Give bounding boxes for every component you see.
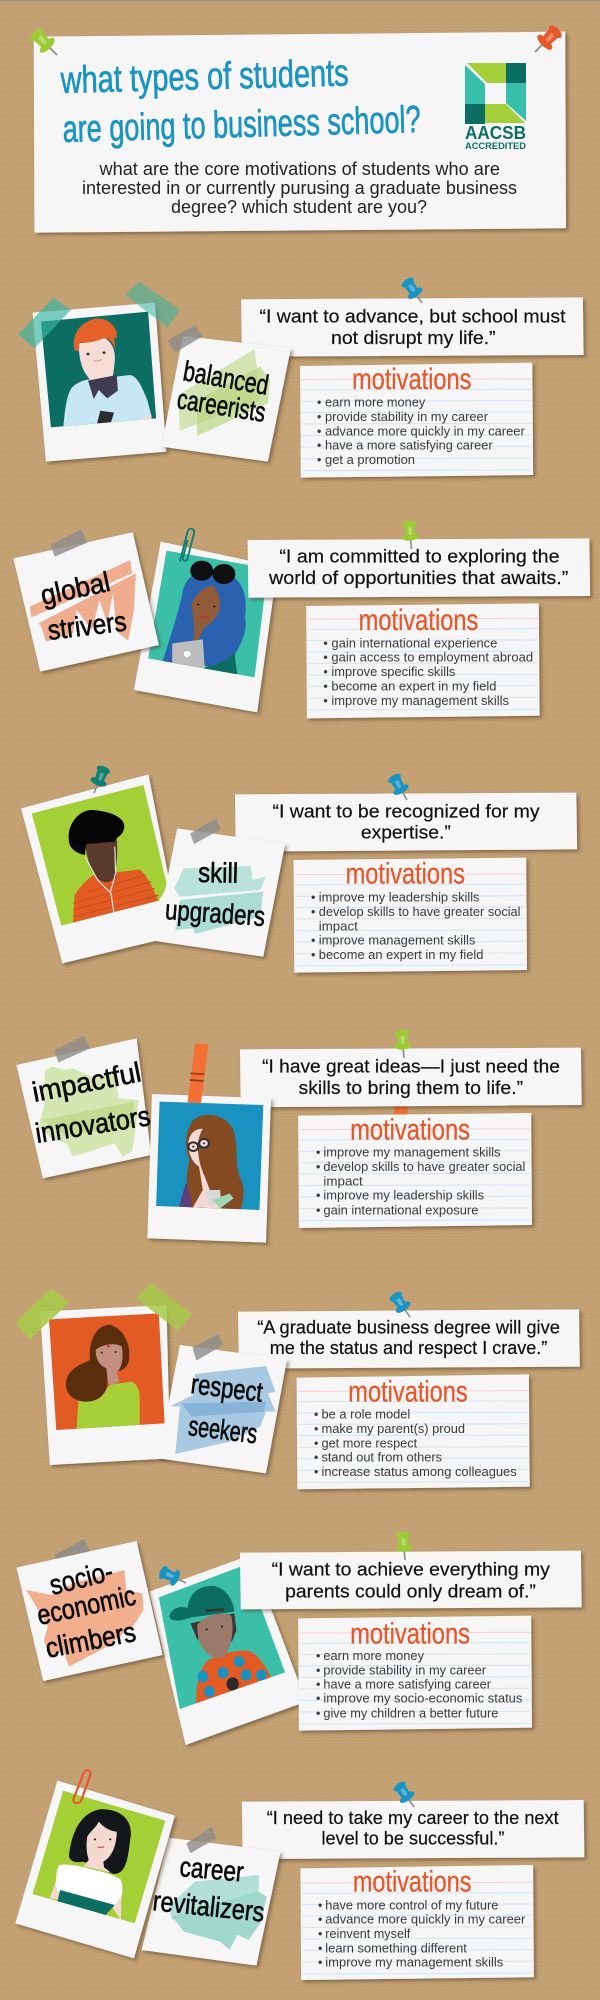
motivations card: develop skills to have greater social bbox=[323, 1160, 525, 1174]
motivations card: • bbox=[314, 1436, 318, 1450]
motivations card: increase status among colleagues bbox=[322, 1465, 517, 1479]
motivations card: have more control of my future bbox=[325, 1898, 498, 1912]
icon: orange pin bbox=[528, 22, 565, 59]
motivations card: become an expert in my field bbox=[319, 948, 483, 962]
motivations card: • bbox=[318, 1956, 322, 1970]
note: global strivers: strivers bbox=[46, 606, 128, 646]
note: global strivers bbox=[13, 529, 159, 672]
quote card: “A graduate business degree will give bbox=[257, 1316, 560, 1337]
panel: skill upgraders bbox=[21, 763, 577, 973]
motivations card: motivations bbox=[350, 1113, 470, 1146]
motivations card: gain access to employment abroad bbox=[331, 651, 533, 665]
quote card: parents could only dream of.” bbox=[285, 1580, 536, 1601]
quote card: “I want to be recognized for my bbox=[272, 800, 540, 821]
motivations card: improve my leadership skills bbox=[319, 891, 480, 905]
motivations card: • bbox=[316, 1203, 320, 1217]
motivations card bbox=[298, 1113, 532, 1228]
AACSB logo: AACSB bbox=[465, 123, 526, 143]
note: socio-economic climbers bbox=[16, 1539, 163, 1681]
motivations card: • bbox=[314, 1422, 318, 1436]
note: respect seekers: seekers bbox=[187, 1410, 259, 1449]
motivations card: learn something different bbox=[325, 1941, 467, 1955]
polaroid portrait bbox=[147, 1043, 271, 1243]
quote card: me the status and respect I crave.” bbox=[270, 1337, 547, 1358]
motivations card: • bbox=[316, 1189, 320, 1203]
motivations card: • bbox=[311, 948, 315, 962]
icon: blue pin bbox=[385, 771, 414, 804]
note: impactful innovators bbox=[16, 1036, 153, 1178]
panel: header bbox=[27, 22, 566, 233]
motivations card: motivations bbox=[350, 1617, 470, 1650]
motivations card bbox=[297, 1374, 530, 1489]
icon: lime pin bbox=[393, 1029, 412, 1059]
quote card: level to be successful.” bbox=[322, 1827, 504, 1848]
quote card bbox=[235, 793, 577, 852]
quote card bbox=[241, 297, 584, 357]
quote card bbox=[240, 1551, 582, 1609]
motivations card: • bbox=[311, 934, 315, 948]
quote card: “I am committed to exploring the bbox=[279, 546, 560, 567]
motivations card: improve my leadership skills bbox=[323, 1189, 484, 1203]
motivations card: • bbox=[317, 396, 321, 410]
motivations card: motivations bbox=[348, 1376, 468, 1409]
panel: impactful innovators bbox=[16, 1029, 582, 1243]
panel: balanced careerists bbox=[18, 275, 584, 478]
icon: orange paperclip bbox=[73, 1770, 91, 1803]
subtitle: what are the core motivations of students who are bbox=[98, 159, 500, 179]
quote card: expertise.” bbox=[361, 821, 451, 842]
motivations card bbox=[300, 1865, 534, 1980]
motivations card: • bbox=[317, 453, 321, 467]
AACSB logo bbox=[465, 63, 527, 151]
quote card: “I have great ideas—I just need the bbox=[262, 1055, 560, 1076]
subtitle: degree? which student are you? bbox=[171, 197, 427, 217]
icon: blue pin bbox=[387, 1289, 417, 1322]
title: are going to business school? bbox=[62, 99, 421, 151]
motivations card: motivations bbox=[352, 363, 472, 396]
note: balanced careerists: balanced bbox=[181, 355, 271, 401]
motivations card: become an expert in my field bbox=[331, 679, 496, 693]
motivations card: • bbox=[323, 679, 328, 693]
motivations card: • bbox=[316, 1146, 320, 1160]
polaroid portrait bbox=[15, 1770, 175, 1958]
quote card: “I want to advance, but school must bbox=[260, 306, 566, 327]
quote card bbox=[248, 538, 590, 598]
motivations card: • bbox=[318, 1941, 322, 1955]
panel: respect seekers bbox=[15, 1283, 580, 1489]
motivations card: get a promotion bbox=[325, 453, 415, 467]
motivations card: have a more satisfying career bbox=[323, 1678, 491, 1692]
motivations card: provide stability in my career bbox=[325, 410, 488, 424]
motivations card: advance more quickly in my career bbox=[325, 1913, 525, 1927]
icon: blue pin bbox=[157, 1563, 190, 1591]
quote card: “I want to achieve everything my bbox=[272, 1559, 551, 1580]
motivations card: • bbox=[323, 636, 328, 650]
icon: lime pin bbox=[400, 520, 420, 550]
polaroid portrait bbox=[18, 282, 180, 462]
note: respect seekers bbox=[158, 1334, 287, 1473]
note: skill upgraders bbox=[155, 818, 285, 957]
motivations card: improve specific skills bbox=[331, 665, 455, 679]
motivations card: improve my management skills bbox=[331, 694, 509, 708]
panel: socio-economic climbers bbox=[16, 1531, 582, 1745]
motivations card: gain international experience bbox=[331, 636, 497, 650]
quote card bbox=[240, 1048, 582, 1107]
polaroid portrait bbox=[21, 774, 180, 963]
motivations card: • bbox=[318, 1927, 322, 1941]
motivations card: • bbox=[314, 1451, 318, 1465]
motivations card: impact bbox=[319, 919, 358, 933]
note: skill upgraders: skill bbox=[198, 857, 238, 889]
motivations card bbox=[300, 363, 533, 478]
quote card: not disrupt my life.” bbox=[331, 327, 496, 348]
motivations card: improve my socio-economic status bbox=[323, 1692, 522, 1706]
motivations card: give my children a better future bbox=[323, 1706, 498, 1720]
orange clip lower end bbox=[394, 1103, 408, 1117]
title bbox=[59, 52, 421, 151]
note: balanced careerists: careerists bbox=[175, 383, 268, 428]
panel: global strivers bbox=[13, 520, 590, 718]
note: balanced careerists bbox=[161, 325, 291, 462]
quote card bbox=[242, 1800, 584, 1859]
note: socio-economic climbers: socio- bbox=[46, 1555, 116, 1601]
note: career revitalizers: career bbox=[178, 1851, 245, 1888]
title: what types of students bbox=[59, 52, 349, 102]
motivations card: motivations bbox=[359, 604, 478, 637]
motivations card bbox=[306, 603, 540, 718]
icon: orange clip bbox=[188, 1043, 209, 1103]
motivations card: impact bbox=[323, 1174, 363, 1188]
motivations card: • bbox=[314, 1407, 318, 1421]
polaroid portrait bbox=[15, 1283, 192, 1465]
note: socio-economic climbers: economic bbox=[34, 1580, 138, 1631]
motivations card: motivations bbox=[353, 1866, 472, 1899]
motivations card: • bbox=[316, 1692, 320, 1706]
motivations card: • bbox=[316, 1706, 320, 1720]
motivations card: • bbox=[316, 1649, 320, 1663]
note: impactful innovators: innovators bbox=[33, 1100, 153, 1149]
icon: lime pin bbox=[27, 25, 64, 62]
polaroid portrait bbox=[134, 529, 277, 712]
motivations card: motivations bbox=[346, 857, 465, 890]
motivations card: improve my management skills bbox=[323, 1146, 501, 1160]
motivations card: stand out from others bbox=[322, 1451, 442, 1465]
motivations card: improve management skills bbox=[319, 934, 475, 948]
motivations card: • bbox=[311, 905, 315, 919]
motivations card: get more respect bbox=[322, 1436, 418, 1450]
motivations card: improve my management skills bbox=[325, 1956, 503, 1970]
motivations card: • bbox=[316, 1160, 320, 1174]
note: skill upgraders: upgraders bbox=[164, 894, 266, 932]
quote card: skills to bring them to life.” bbox=[298, 1077, 523, 1098]
icon: lime pin bbox=[394, 1531, 413, 1561]
motivations card: • bbox=[316, 1678, 320, 1692]
motivations card: • bbox=[311, 891, 315, 905]
motivations card: • bbox=[314, 1465, 318, 1479]
icon: teal pin bbox=[86, 763, 113, 796]
motivations card: have a more satisfying career bbox=[325, 439, 493, 453]
quote card: world of opportunities that awaits.” bbox=[268, 567, 568, 588]
note: respect seekers: respect bbox=[189, 1368, 265, 1408]
motivations card: reinvent myself bbox=[325, 1927, 411, 1941]
subtitle: interested in or currently purusing a graduate business bbox=[82, 178, 517, 198]
motivations card: • bbox=[318, 1898, 322, 1912]
motivations card: be a role model bbox=[322, 1407, 410, 1421]
motivations card: • bbox=[317, 410, 321, 424]
note: career revitalizers: revitalizers bbox=[151, 1885, 266, 1928]
motivations card: advance more quickly in my career bbox=[325, 424, 525, 438]
motivations card: gain international exposure bbox=[323, 1203, 478, 1217]
AACSB logo: ACCREDITED bbox=[465, 141, 527, 151]
motivations card: • bbox=[317, 424, 321, 438]
motivations card: earn more money bbox=[323, 1649, 425, 1663]
motivations card: • bbox=[316, 1663, 320, 1677]
quote card: “I need to take my career to the next bbox=[267, 1807, 559, 1828]
icon: blue pin bbox=[391, 1779, 421, 1812]
panel: career revitalizers bbox=[15, 1770, 584, 1980]
motivations card bbox=[294, 857, 527, 973]
motivations card: make my parent(s) proud bbox=[322, 1422, 465, 1436]
note: career revitalizers bbox=[142, 1827, 281, 1966]
motivations card: provide stability in my career bbox=[323, 1663, 486, 1677]
quote card bbox=[238, 1309, 580, 1369]
motivations card: • bbox=[323, 651, 328, 665]
subtitle bbox=[82, 159, 517, 217]
motivations card: • bbox=[323, 665, 328, 679]
motivations card: • bbox=[318, 1913, 322, 1927]
motivations card bbox=[298, 1616, 532, 1731]
motivations card: • bbox=[317, 439, 321, 453]
motivations card: earn more money bbox=[325, 396, 426, 410]
icon: blue pin bbox=[399, 275, 429, 308]
note: impactful innovators: impactful bbox=[30, 1056, 144, 1108]
motivations card: • bbox=[323, 694, 328, 708]
polaroid portrait bbox=[149, 1555, 306, 1745]
note: global strivers: global bbox=[38, 566, 113, 611]
note: socio-economic climbers: climbers bbox=[43, 1616, 138, 1664]
motivations card: develop skills to have greater social bbox=[319, 905, 520, 919]
